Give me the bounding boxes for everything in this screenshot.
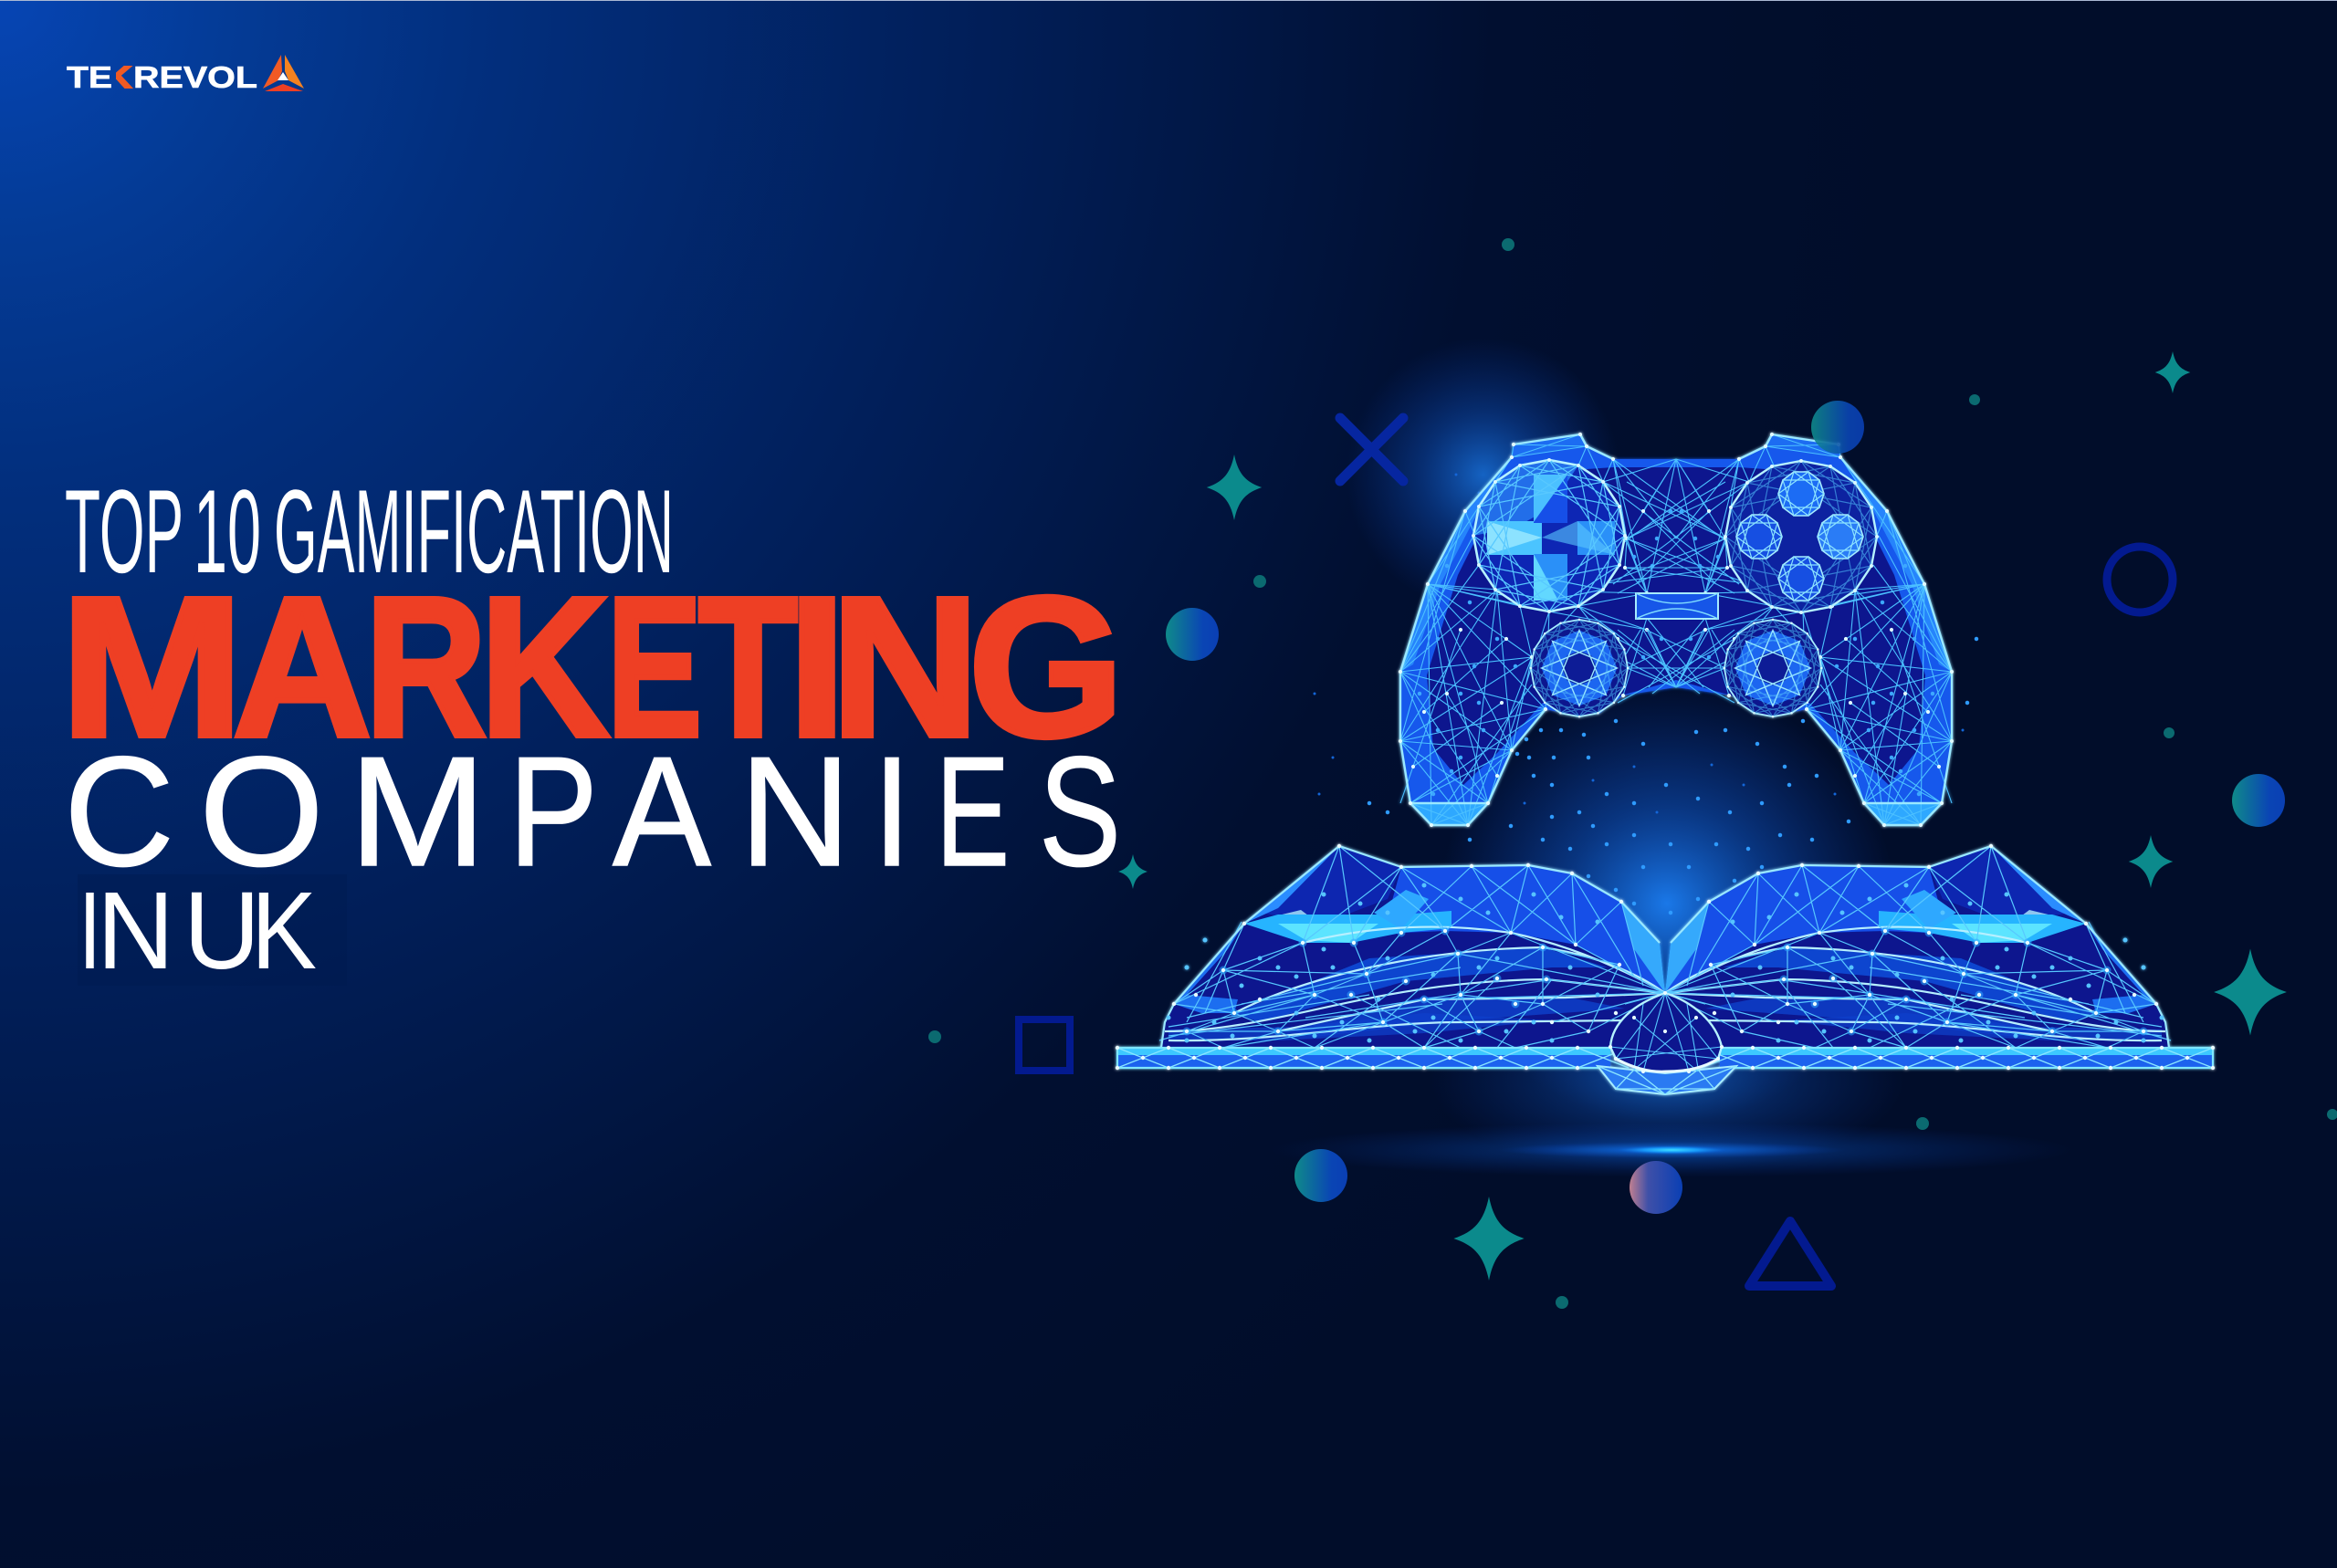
title line: companies: A xyxy=(613,725,711,899)
title line: companies: I xyxy=(873,725,911,899)
title line: companies: S xyxy=(1039,725,1121,899)
sparkle xyxy=(1453,1197,1525,1281)
button bottom xyxy=(1778,557,1824,601)
title line: companies: P xyxy=(508,725,598,899)
title line: marketing: N xyxy=(831,557,980,779)
icon: game symbol triangle xyxy=(1749,1221,1831,1286)
sparkle xyxy=(1118,854,1148,889)
title line: top 10 gamification: TOP xyxy=(65,465,183,598)
button right xyxy=(1818,515,1863,559)
decorative teal sparkles xyxy=(1118,351,2287,1281)
logo: TEKREVOL: REVOL xyxy=(133,60,257,94)
title line: in uk: U xyxy=(183,868,260,992)
book right page xyxy=(1665,846,2213,1068)
title line: companies: C xyxy=(64,725,174,899)
ball xyxy=(1294,1149,1347,1202)
controller dark interior xyxy=(1427,467,1925,785)
center touchpad xyxy=(1636,593,1718,619)
title line: companies: N xyxy=(739,725,851,899)
title block xyxy=(60,465,1124,992)
title line: in uk: K xyxy=(251,868,317,992)
open book xyxy=(1117,846,2213,1094)
logo: TEKREVOL xyxy=(67,55,304,94)
button left xyxy=(1736,515,1782,559)
d-pad cross xyxy=(1487,475,1615,601)
controller left half mesh xyxy=(1400,434,1753,825)
title block: GAMIFICATION xyxy=(274,465,674,598)
title line: in uk: N xyxy=(97,868,174,992)
title line: marketing: R xyxy=(365,557,487,779)
icon: game symbol square xyxy=(1019,1019,1070,1071)
ball xyxy=(1166,608,1219,661)
title line: marketing: T xyxy=(698,557,798,779)
title line: marketing: A xyxy=(233,557,372,779)
logo: TEKREVOL: K xyxy=(106,60,131,94)
controller body xyxy=(1400,434,1952,825)
d-pad disc xyxy=(1473,460,1625,612)
spine dome xyxy=(1610,993,1722,1071)
title line: in uk: I xyxy=(79,868,101,992)
particles between controller and book xyxy=(1369,639,1976,913)
illustration glows xyxy=(1347,338,1904,1173)
game controller xyxy=(1400,434,1952,825)
button top xyxy=(1778,472,1824,516)
ball xyxy=(1630,1161,1682,1214)
ball xyxy=(1811,401,1864,454)
title line: top 10 gamification: 10 xyxy=(194,465,261,598)
icon: game symbol circle xyxy=(2107,547,2173,612)
decorative teal dots xyxy=(928,238,2337,1309)
title line: companies: O xyxy=(199,725,324,899)
book left page xyxy=(1117,846,1665,1068)
title backing panel xyxy=(78,874,347,986)
title line: marketing: K xyxy=(480,557,609,779)
right thumbstick xyxy=(1724,620,1821,716)
title line: marketing: I xyxy=(788,557,846,779)
sparkle xyxy=(2155,351,2190,393)
icon: game symbol X xyxy=(1340,418,1403,481)
logo: TEKREVOL: TE xyxy=(67,60,112,94)
ball xyxy=(2232,774,2285,827)
action buttons disc xyxy=(1725,461,1877,612)
sparkle xyxy=(2129,835,2173,888)
title line: companies: E xyxy=(936,725,1010,899)
floor light flare xyxy=(1270,1123,2073,1177)
title line: marketing: E xyxy=(607,557,702,779)
sparkle xyxy=(1207,455,1262,520)
controller right half mesh xyxy=(1599,434,1952,825)
spine bottom xyxy=(1598,1066,1736,1094)
title line: marketing: M xyxy=(60,557,244,779)
title line: companies: M xyxy=(349,725,487,899)
left thumbstick xyxy=(1531,620,1628,716)
decorative gradient balls xyxy=(1166,401,2285,1214)
title line: marketing: G xyxy=(969,557,1124,779)
sparkle xyxy=(2214,949,2287,1035)
